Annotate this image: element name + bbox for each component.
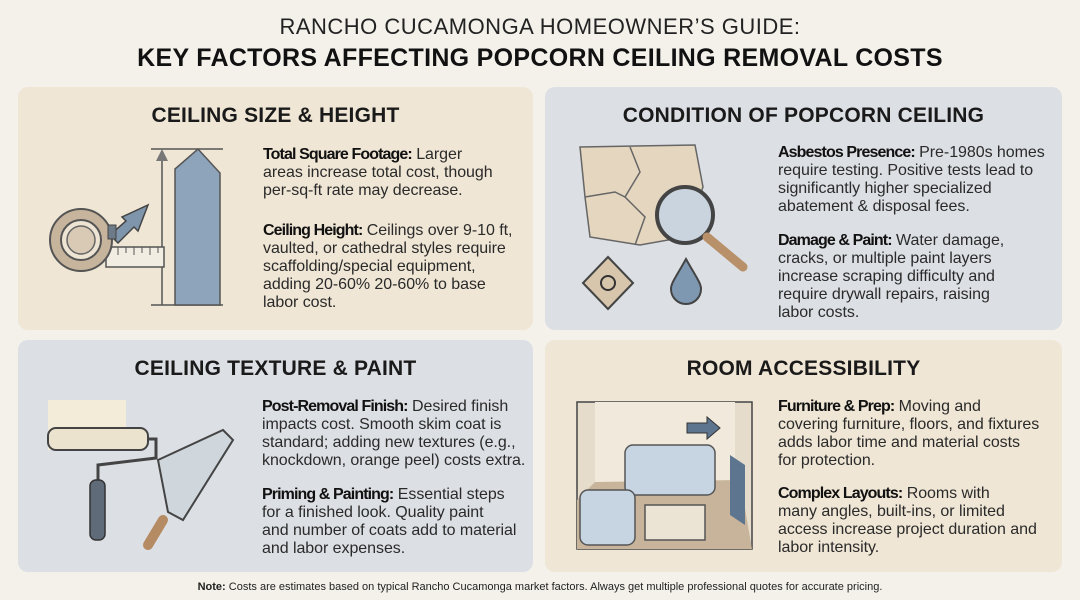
text block: Complex Layouts: Rooms with [778,485,990,502]
text block: many angles, built-ins, or limited [778,503,1005,520]
text block: abatement & disposal fees. [778,198,970,215]
text block: increase scraping difficulty and [778,268,995,285]
text block: per-sq-ft rate may decrease. [263,182,463,199]
text block: scaffolding/special equipment, [263,258,476,275]
text block: areas increase total cost, though [263,164,493,181]
text block: labor intensity. [778,539,879,556]
text block: require drywall repairs, raising [778,286,990,303]
heading: CEILING SIZE & HEIGHT [151,104,400,127]
text block: knockdown, orange peel) costs extra. [262,452,525,469]
text block: Total Square Footage: Larger [263,146,462,163]
text block: Post-Removal Finish: Desired finish [262,398,508,415]
icon: tape measure and height bar [49,148,223,306]
note: Note: Costs are estimates based on typical Rancho Cucamonga market factors. Always get multiple professional quotes for accurate pricing. [198,581,882,593]
panel: room accessibility [545,340,1062,572]
icon: cracked ceiling, magnifier, hazard, drop [579,144,748,310]
text block: Damage & Paint: Water damage, [778,232,1004,249]
panel: condition of popcorn ceiling [545,87,1062,330]
text block: Ceiling Height: Ceilings over 9-10 ft, [263,222,512,239]
text block [263,146,512,311]
text block: significantly higher specialized [778,180,992,197]
text block: labor cost. [263,294,336,311]
title [137,14,943,72]
text block: standard; adding new textures (e.g., [262,434,515,451]
heading: CEILING TEXTURE & PAINT [135,357,416,380]
text block: for a finished look. Quality paint [262,504,484,521]
text block: adds labor time and material costs [778,434,1020,451]
text block: access increase project duration and [778,521,1037,538]
text block: require testing. Positive tests lead to [778,162,1033,179]
text block [778,144,1045,321]
text block: Asbestos Presence: Pre-1980s homes [778,144,1045,161]
text block: and number of coats add to material [262,522,516,539]
text block: labor costs. [778,304,859,321]
text block: cracks, or multiple paint layers [778,250,992,267]
text block: for protection. [778,452,875,469]
heading: CONDITION OF POPCORN CEILING [623,104,984,127]
icon: room with covered furniture [576,401,753,550]
panel: ceiling size & height [18,87,533,330]
text block: adding 20-60% 20-60% to base [263,276,486,293]
text block: Priming & Painting: Essential steps [262,486,505,503]
icon: roller and trowel [47,400,234,550]
panel: ceiling texture & paint [18,340,533,572]
text block: impacts cost. Smooth skim coat is [262,416,501,433]
text block [262,398,525,557]
text block: covering furniture, floors, and fixtures [778,416,1039,433]
text block: Furniture & Prep: Moving and [778,398,981,415]
text block: vaulted, or cathedral styles require [263,240,506,257]
text block: and labor expenses. [262,540,405,557]
title: RANCHO CUCAMONGA HOMEOWNER’S GUIDE: [279,14,801,39]
title: KEY FACTORS AFFECTING POPCORN CEILING REMOVAL COSTS [137,44,943,72]
heading: ROOM ACCESSIBILITY [687,357,920,380]
text block [778,398,1039,556]
